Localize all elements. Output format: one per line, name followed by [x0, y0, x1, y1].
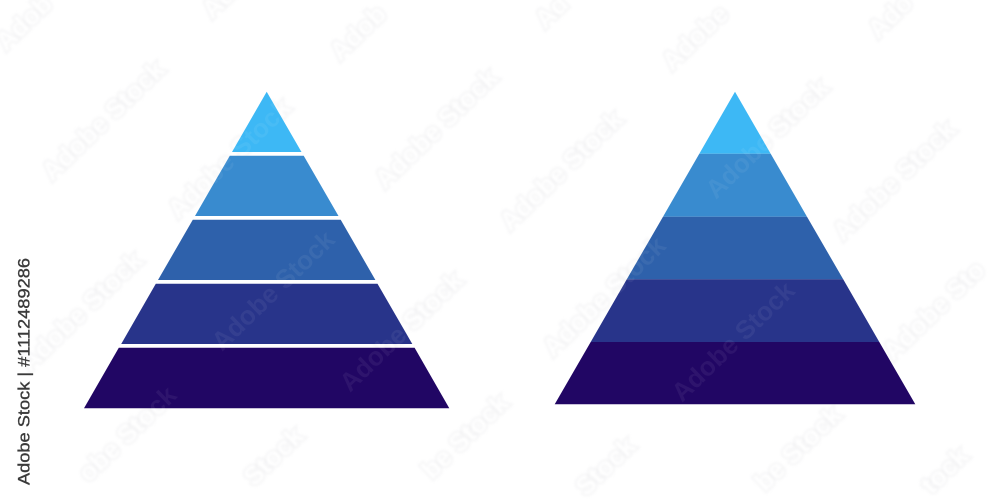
layer 5: base navy	[555, 342, 915, 404]
watermark: faint text over the pyramids: Adobe Stock	[161, 92, 297, 224]
watermark: repeated Adobe Stock text on the white background: Adobe Sto	[876, 254, 991, 366]
layer 1: top light blue	[232, 92, 302, 152]
watermark: repeated Adobe Stock text on the white background: Adobe Stock	[536, 230, 672, 362]
watermark: faint text over the pyramids: Adobe Stock	[333, 265, 469, 397]
watermark: faint text over the pyramids: Adobe Stock	[536, 230, 672, 362]
watermark: repeated Adobe Stock text on the white background: Adobe Stock	[13, 245, 149, 377]
pyramid: joined layers	[555, 92, 915, 404]
layer 3: medium blue	[627, 217, 843, 279]
layer 5: base navy	[84, 348, 449, 408]
watermark: faint text over the pyramids	[141, 72, 991, 421]
watermark: repeated Adobe Stock text on the white background: be Stock	[748, 399, 848, 497]
layer 4: dark blue	[121, 284, 412, 344]
watermark: repeated Adobe Stock text on the white background: Stock	[569, 430, 642, 500]
pyramid: separated layers with white gaps	[84, 92, 449, 408]
watermark: repeated Adobe Stock text on the white background: Stock	[237, 420, 310, 492]
layer 3: medium blue	[158, 220, 375, 280]
watermark: repeated Adobe Stock text on the white background: Adobe Stock	[333, 265, 469, 397]
watermark: faint text over the pyramids: Adobe Stock	[699, 72, 835, 204]
watermark: faint text over the pyramids: Adobe Sto	[876, 254, 991, 366]
watermark: repeated Adobe Stock text on the white background: Adobe Stock	[368, 62, 504, 194]
watermark: faint text over the pyramids: Adobe Stock	[665, 275, 801, 407]
watermark: repeated Adobe Stock text on the white background: Adobe Stock	[826, 114, 962, 246]
watermark: repeated Adobe Stock text on the white background: Adobe Stock	[161, 92, 297, 224]
layer 1: top light blue	[699, 92, 771, 154]
watermark: repeated Adobe Stock text on the white background: Adobe Stock	[699, 72, 835, 204]
watermark: repeated Adobe Stock text on the white background: obe Stock	[72, 379, 183, 488]
watermark: faint text over the pyramids: ck	[141, 379, 183, 421]
layer 2: sky blue	[663, 154, 807, 217]
watermark: faint text over the pyramids: Adobe Stock	[205, 224, 341, 356]
watermark: repeated Adobe Stock text on the white background: Adob	[323, 0, 392, 66]
watermark: repeated Adobe Stock text on the white background: Adobe Stock	[493, 104, 629, 236]
watermark: repeated Adobe Stock text on the white background: Adobe Stock	[35, 54, 171, 186]
layer 4: dark blue	[591, 279, 879, 342]
watermark: repeated Adobe Stock text on the white background: Adobe	[655, 0, 734, 76]
side credit text: Adobe Stock | #1112489286	[14, 258, 34, 485]
watermark: repeated Adobe Stock text on the white background: be Stock	[415, 387, 515, 485]
watermark: repeated Adobe Stock text on the white background: tock	[915, 440, 975, 499]
layer 2: sky blue	[195, 156, 338, 216]
